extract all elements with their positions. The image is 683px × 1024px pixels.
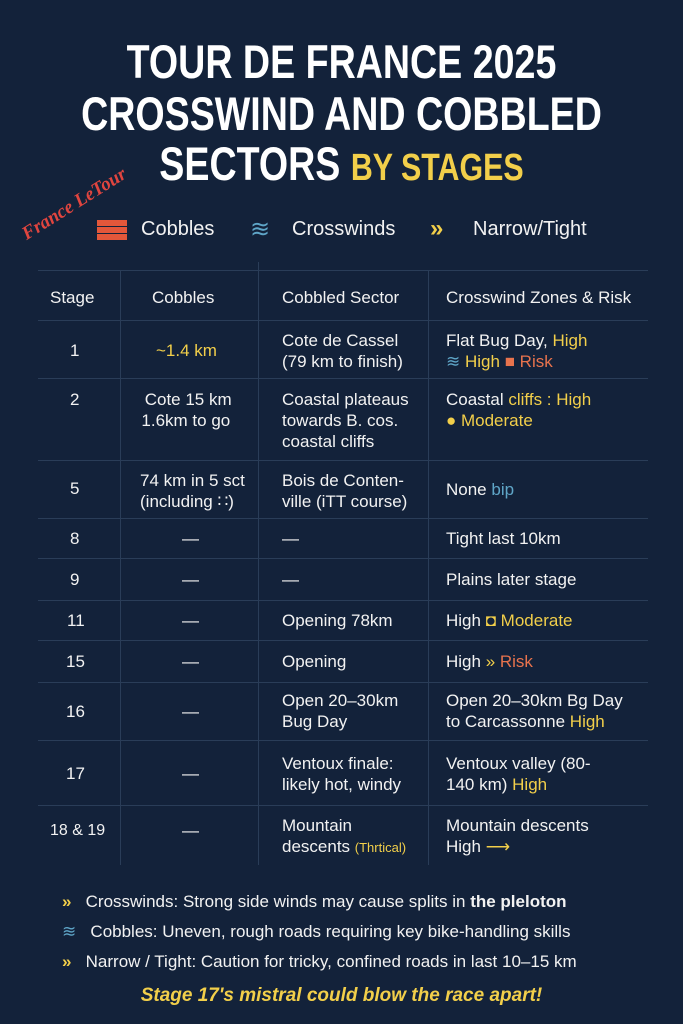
table: Open 20–30km [282,691,398,710]
footer notes: » Crosswinds: Strong side winds may cause splits in the pleloton [62,892,567,911]
table: Ventoux finale: [282,754,394,773]
table: — [182,570,199,589]
row 1: 1 [70,341,79,360]
table: descents (Thrtical) [282,837,406,856]
table: ≋ High ■ Risk [446,352,553,371]
title [81,35,602,190]
table: Bois de Conten- [282,471,404,490]
callout: Stage 17's mistral could blow the race apart! [141,985,542,1006]
table: None bip [446,480,514,499]
row 15: 15 [66,652,85,671]
table: (79 km to finish) [282,352,403,371]
row 5: 5 [70,479,79,498]
title: TOUR DE FRANCE 2025 [127,35,556,88]
row 8: 8 [70,529,79,548]
table: Coastal cliffs : High [446,390,591,409]
table: Ventoux valley (80- [446,754,591,773]
table: Cobbles [152,288,214,307]
table: — [182,702,199,721]
table: Crosswind Zones & Risk [446,288,631,307]
table: — [182,529,199,548]
table: 1.6km to go [141,411,230,430]
table: — [282,570,299,589]
icon: bricks [97,220,127,241]
footer notes: » Narrow / Tight: Caution for tricky, confined roads in last 10–15 km [62,952,577,971]
table: High ◘ Moderate [446,611,572,630]
table: Cote de Cassel [282,331,398,350]
title: SECTORS BY STAGES [159,137,524,190]
header row: Stage [50,288,94,307]
table: Opening 78km [282,611,393,630]
table: Mountain descents [446,816,589,835]
table: 74 km in 5 sct [140,471,245,490]
table: ville (iTT course) [282,492,407,511]
table: — [282,529,299,548]
table: Plains later stage [446,570,576,589]
title: CROSSWIND AND COBBLED [81,87,602,140]
row 11: 11 [67,611,85,630]
table: Tight last 10km [446,529,561,548]
table: ● Moderate [446,411,533,430]
row 16: 16 [66,702,85,721]
table: — [182,764,199,783]
table: Flat Bug Day, High [446,331,587,350]
table: Coastal plateaus [282,390,409,409]
table: 140 km) High [446,775,547,794]
row 18&19: 18 & 19 [50,822,105,839]
table: towards B. cos. [282,411,398,430]
table: Opening [282,652,346,671]
stamp: France LeTour: France LeTour [18,164,130,244]
table: (including ∷) [140,492,234,511]
legend: Narrow/Tight [473,218,587,240]
row 17: 17 [66,764,85,783]
table: ~1.4 km [156,341,217,360]
table: High » Risk [446,652,533,671]
row 9: 9 [70,570,79,589]
icon: chevrons: » [430,215,443,242]
legend: Cobbles [141,218,214,240]
table: — [182,821,199,840]
legend: Crosswinds [292,218,395,240]
table: — [182,611,199,630]
table: likely hot, windy [282,775,401,794]
table: High ⟶ [446,837,510,856]
footer notes [62,892,577,971]
legend [97,215,587,243]
table: Bug Day [282,712,347,731]
footer notes: ≋ Cobbles: Uneven, rough roads requiring key bike-handling skills [62,922,570,941]
table: Cobbled Sector [282,288,399,307]
table: Cote 15 km [145,390,232,409]
table: Mountain [282,816,352,835]
table: Open 20–30km Bg Day [446,691,623,710]
row 2: 2 [70,390,79,409]
table: coastal cliffs [282,432,374,451]
table: — [182,652,199,671]
icon: wind: ≋ [250,216,270,243]
table: to Carcassonne High [446,712,605,731]
